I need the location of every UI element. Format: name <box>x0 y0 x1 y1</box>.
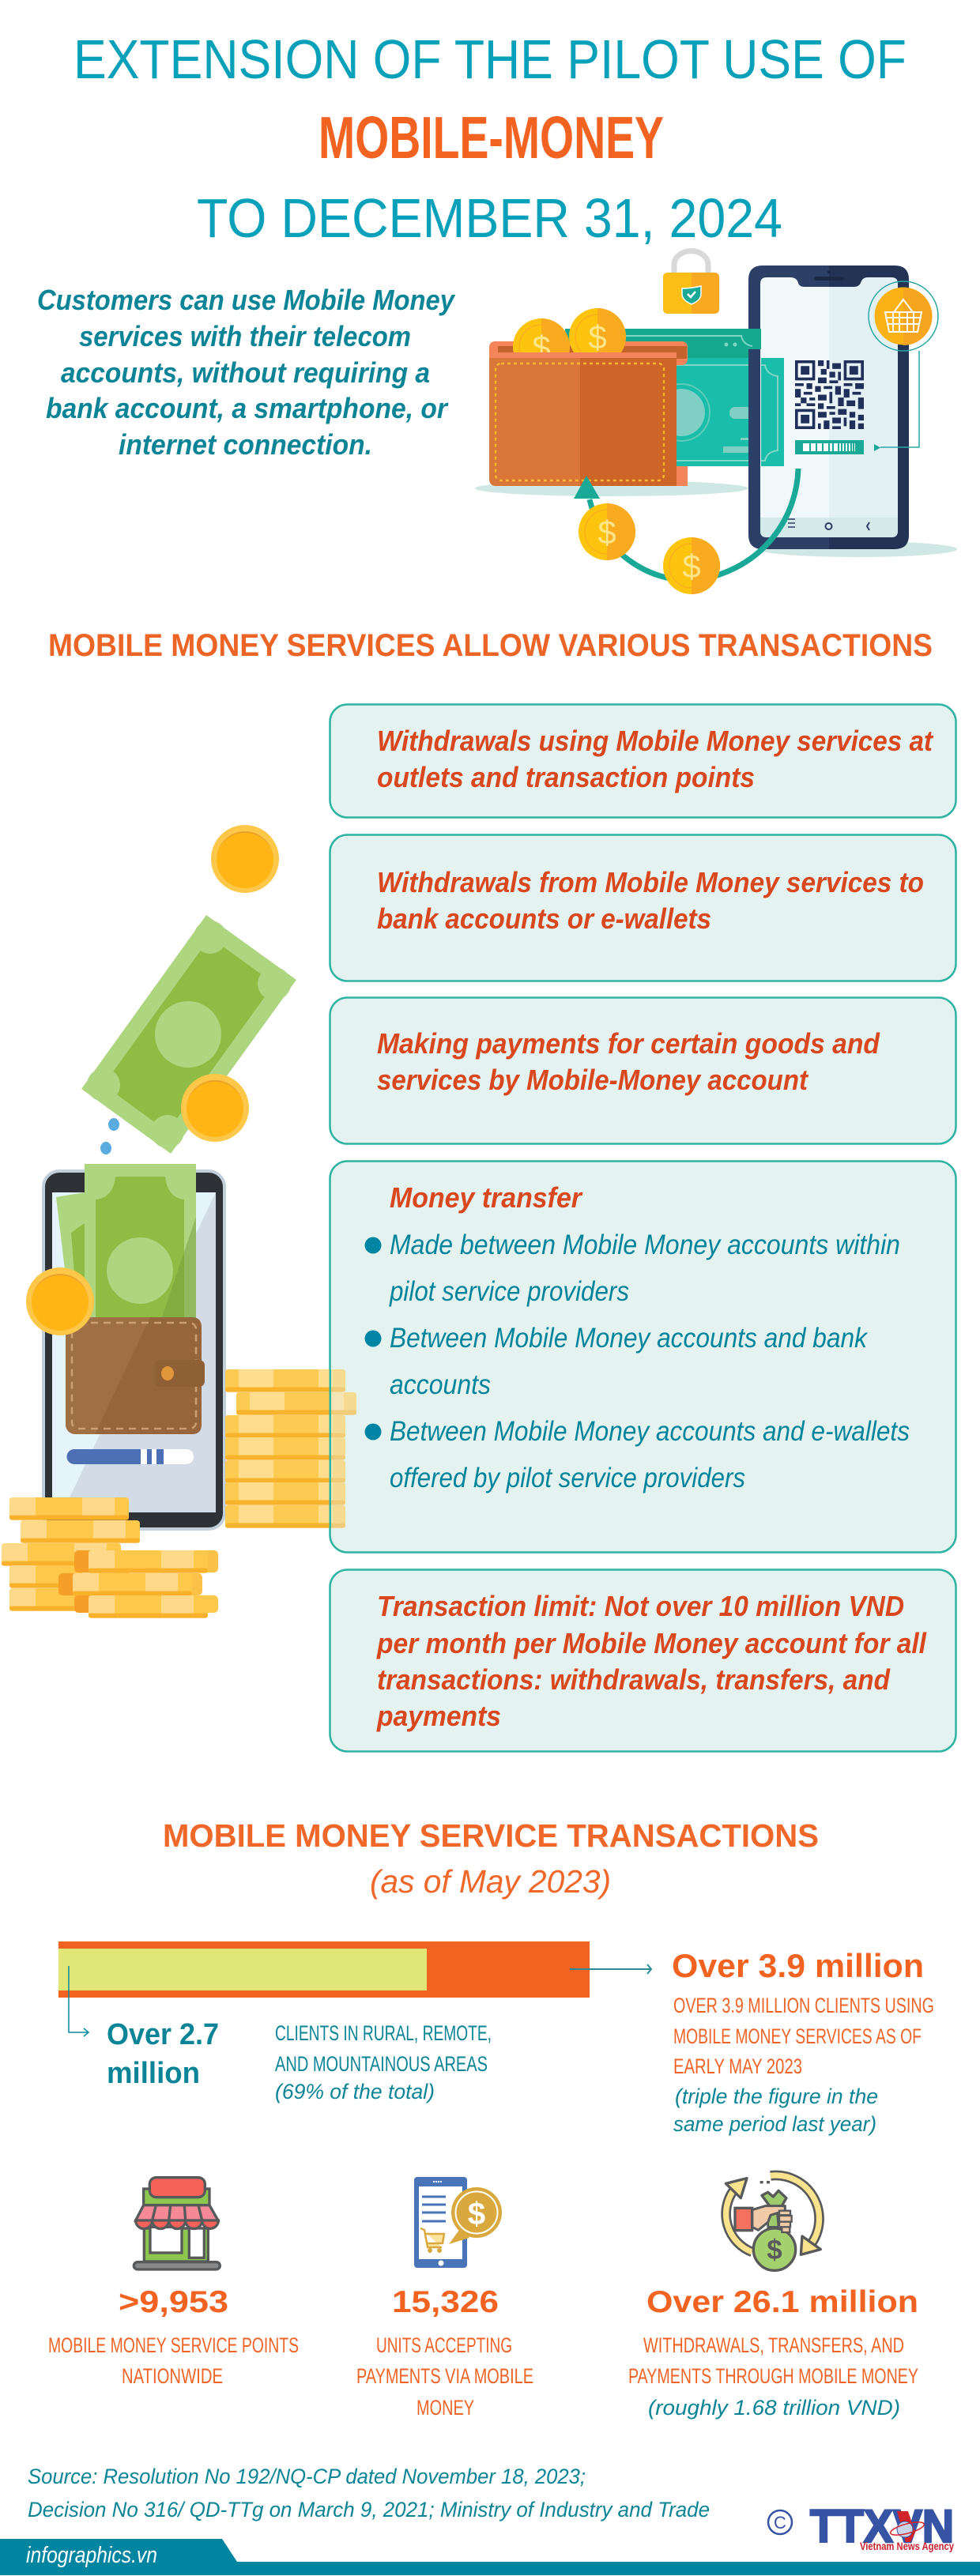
panel: payments: services by Mobile-Money account <box>377 1064 809 1096</box>
phone <box>748 266 909 549</box>
icon: QR code <box>795 360 864 429</box>
icon: left coin stack <box>2 1497 140 1611</box>
text block: rural clients: CLIENTS IN RURAL, REMOTE, <box>275 2021 492 2045</box>
panel: money transfer: Between Mobile Money accounts and e-wallets <box>390 1416 910 1447</box>
panel: withdrawals to bank accounts <box>330 834 956 981</box>
panel: money transfer: Between Mobile Money accounts and bank <box>390 1323 868 1354</box>
banknote behind wallet <box>565 329 784 466</box>
callout: over 3.9 million: (triple the figure in the <box>675 2085 878 2108</box>
section heading: transactions: MOBILE MONEY SERVICE TRANSACTIONS <box>163 1817 819 1854</box>
icon: phone address bar <box>66 1449 194 1464</box>
panel: payments: Making payments for certain goods and <box>377 1027 880 1060</box>
icon: falling banknote <box>81 915 296 1154</box>
panel: money transfer: Money transfer <box>390 1181 583 1214</box>
icon: shop <box>134 2178 220 2269</box>
icon: right coin stack <box>225 1369 356 1528</box>
title: TO DECEMBER 31, 2024 <box>197 187 782 249</box>
coins in wallet <box>513 308 626 375</box>
panel: withdrawals at outlets: outlets and transaction points <box>377 761 755 793</box>
icon: money bag cycle <box>726 2175 820 2270</box>
logo: TTXVN: C <box>774 2513 786 2533</box>
arrow: rural clients <box>69 1966 89 2036</box>
panel: money transfer: Made between Mobile Money accounts within <box>390 1230 900 1260</box>
stat: transactions: (roughly 1.68 trillion VND) <box>648 2396 900 2420</box>
icon: phone payment: $ <box>468 2197 485 2231</box>
icon: banknote in phone <box>85 1164 196 1320</box>
stat: transactions <box>628 2285 918 2420</box>
footer band: infographics.vn <box>26 2543 157 2568</box>
wallet back <box>489 341 688 486</box>
callout: over 3.9 million: same period last year) <box>673 2112 876 2136</box>
bar chart: clients <box>58 1941 590 1998</box>
intro text: Customers can use Mobile Money <box>37 284 456 316</box>
logo: TTXVN: Vietnam News Agency <box>860 2540 954 2552</box>
stat: service points: NATIONWIDE <box>122 2364 223 2388</box>
illustration: wallet, phone and QR payment <box>475 251 957 594</box>
callout: over 2.7 million: Over 2.7 <box>107 2018 219 2051</box>
stat: transactions: Over 26.1 million <box>646 2285 918 2319</box>
icon: shopping basket <box>869 281 938 451</box>
stat: service points: >9,953 <box>119 2285 228 2319</box>
icon: padlock <box>663 251 719 314</box>
intro text: internet connection. <box>119 428 372 461</box>
stat: service points <box>48 2285 299 2388</box>
text block: rural clients <box>275 2021 492 2103</box>
logo: TTXVN: TTXVN <box>810 2501 954 2552</box>
panel: money transfer: pilot service providers <box>389 1276 629 1307</box>
panel: withdrawals to bank accounts: bank accounts or e-wallets <box>377 902 711 935</box>
icon: money bag cycle: $ <box>767 2235 782 2265</box>
wallet front <box>489 352 677 486</box>
panel: transaction limit: transactions: withdrawals, transfers, and <box>377 1663 891 1696</box>
panel: transaction limit: per month per Mobile Money account for all <box>376 1627 927 1659</box>
source note <box>28 2465 710 2521</box>
icon: phone <box>43 1171 224 1529</box>
section heading: services: MOBILE MONEY SERVICES ALLOW VARIOUS TRANSACTIONS <box>48 628 933 663</box>
panel: withdrawals at outlets: Withdrawals using Mobile Money services at <box>377 725 934 757</box>
icon: blue drops <box>100 1118 119 1154</box>
callout: over 3.9 million <box>672 1947 934 2136</box>
title: EXTENSION OF THE PILOT USE OF <box>74 28 906 90</box>
icon: barcode <box>795 440 864 454</box>
panel: withdrawals to bank accounts: Withdrawals from Mobile Money services to <box>377 866 924 898</box>
text block: rural clients: (69% of the total) <box>275 2080 435 2103</box>
callout: over 2.7 million: million <box>107 2057 200 2090</box>
arrow: payment flow from phone to wallet <box>574 469 798 581</box>
callout: over 2.7 million <box>107 2018 219 2090</box>
title: MOBILE-MONEY <box>318 104 664 171</box>
arrow: total clients <box>570 1964 651 1974</box>
stat: accepting units: 15,326 <box>392 2285 499 2319</box>
section heading: transactions <box>163 1817 819 1900</box>
icon: top gold coin <box>211 825 279 893</box>
stat: accepting units: MONEY <box>416 2396 474 2420</box>
illustration: money falling into phone wallet <box>2 825 356 1618</box>
stat: accepting units: PAYMENTS VIA MOBILE <box>356 2364 533 2388</box>
panel: withdrawals at outlets <box>330 705 956 817</box>
icon: front coin stack <box>58 1550 218 1618</box>
title <box>74 28 906 249</box>
panel: transaction limit: payments <box>376 1700 501 1732</box>
panel: money transfer <box>330 1162 956 1552</box>
icon: brown wallet <box>66 1317 205 1434</box>
intro text: accounts, without requiring a <box>61 356 430 389</box>
icon: second gold coin <box>181 1074 249 1142</box>
intro text: bank account, a smartphone, or <box>46 392 449 424</box>
section heading: transactions: (as of May 2023) <box>370 1863 611 1900</box>
panel: transaction limit: Transaction limit: Not over 10 million VND <box>377 1590 904 1622</box>
intro text: services with their telecom <box>79 320 411 352</box>
panel: payments <box>330 997 956 1144</box>
panel: transaction limit <box>330 1569 956 1751</box>
coins on flow arrow <box>579 503 720 594</box>
icon: gold coin on phone <box>26 1267 94 1335</box>
intro text <box>37 284 456 461</box>
stat: accepting units <box>356 2285 533 2420</box>
footer band <box>0 2539 980 2575</box>
panel: money transfer: accounts <box>390 1369 491 1400</box>
callout: over 3.9 million: EARLY MAY 2023 <box>673 2054 802 2078</box>
source note: Decision No 316/ QD-TTg on March 9, 2021; Ministry of Industry and Trade <box>28 2498 710 2521</box>
panel: money transfer: offered by pilot service providers <box>390 1463 745 1493</box>
stat: accepting units: UNITS ACCEPTING <box>376 2333 512 2357</box>
text block: rural clients: AND MOUNTAINOUS AREAS <box>275 2052 488 2076</box>
source note: Source: Resolution No 192/NQ-CP dated November 18, 2023; <box>28 2465 586 2488</box>
stat: service points: MOBILE MONEY SERVICE POINTS <box>48 2333 299 2357</box>
callout: over 3.9 million: Over 3.9 million <box>672 1947 924 1984</box>
icon: phone payment <box>414 2177 502 2268</box>
